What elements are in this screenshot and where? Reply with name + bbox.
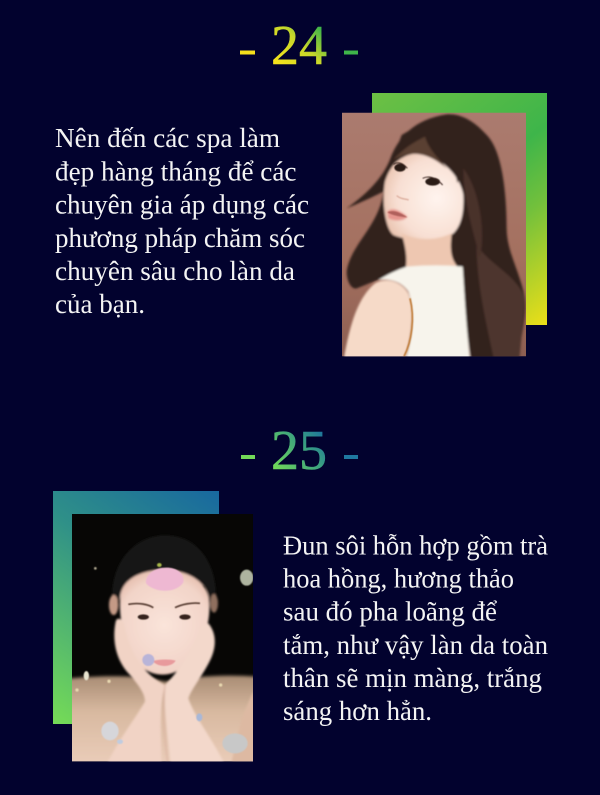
heading: number 25: 25 <box>271 420 327 482</box>
paragraph: section 24: đẹp hàng tháng để các <box>55 156 297 186</box>
photo: woman resting face on hands <box>72 514 253 762</box>
gradient frame: section 25 <box>53 491 219 724</box>
paragraph: section 25: sáng hơn hẳn. <box>283 696 432 726</box>
gradient frame: section 24 <box>372 93 547 325</box>
paragraph: section 24 <box>55 123 309 319</box>
heading: number 25 <box>241 420 358 482</box>
paragraph: section 25: tắm, như vậy làn da toàn <box>283 630 548 660</box>
paragraph: section 25: sau đó pha loãng để <box>283 596 497 626</box>
paragraph: section 24: phương pháp chăm sóc <box>55 223 305 253</box>
infographic <box>53 26 548 762</box>
paragraph: section 25 <box>283 530 548 726</box>
paragraph: section 24: chuyên gia áp dụng các <box>55 190 309 220</box>
paragraph: section 24: Nên đến các spa làm <box>55 123 280 153</box>
paragraph: section 25: Đun sôi hỗn hợp gồm trà <box>283 530 548 560</box>
heading: number 24: 24 <box>271 15 327 77</box>
paragraph: section 25: hoa hồng, hương thảo <box>283 564 514 594</box>
paragraph: section 24: của bạn. <box>55 289 145 319</box>
photo: woman with long dark hair <box>342 113 526 372</box>
heading: number 24 <box>240 15 358 77</box>
paragraph: section 25: thân sẽ mịn màng, trắng <box>283 663 542 693</box>
paragraph: section 24: chuyên sâu cho làn da <box>55 256 295 286</box>
